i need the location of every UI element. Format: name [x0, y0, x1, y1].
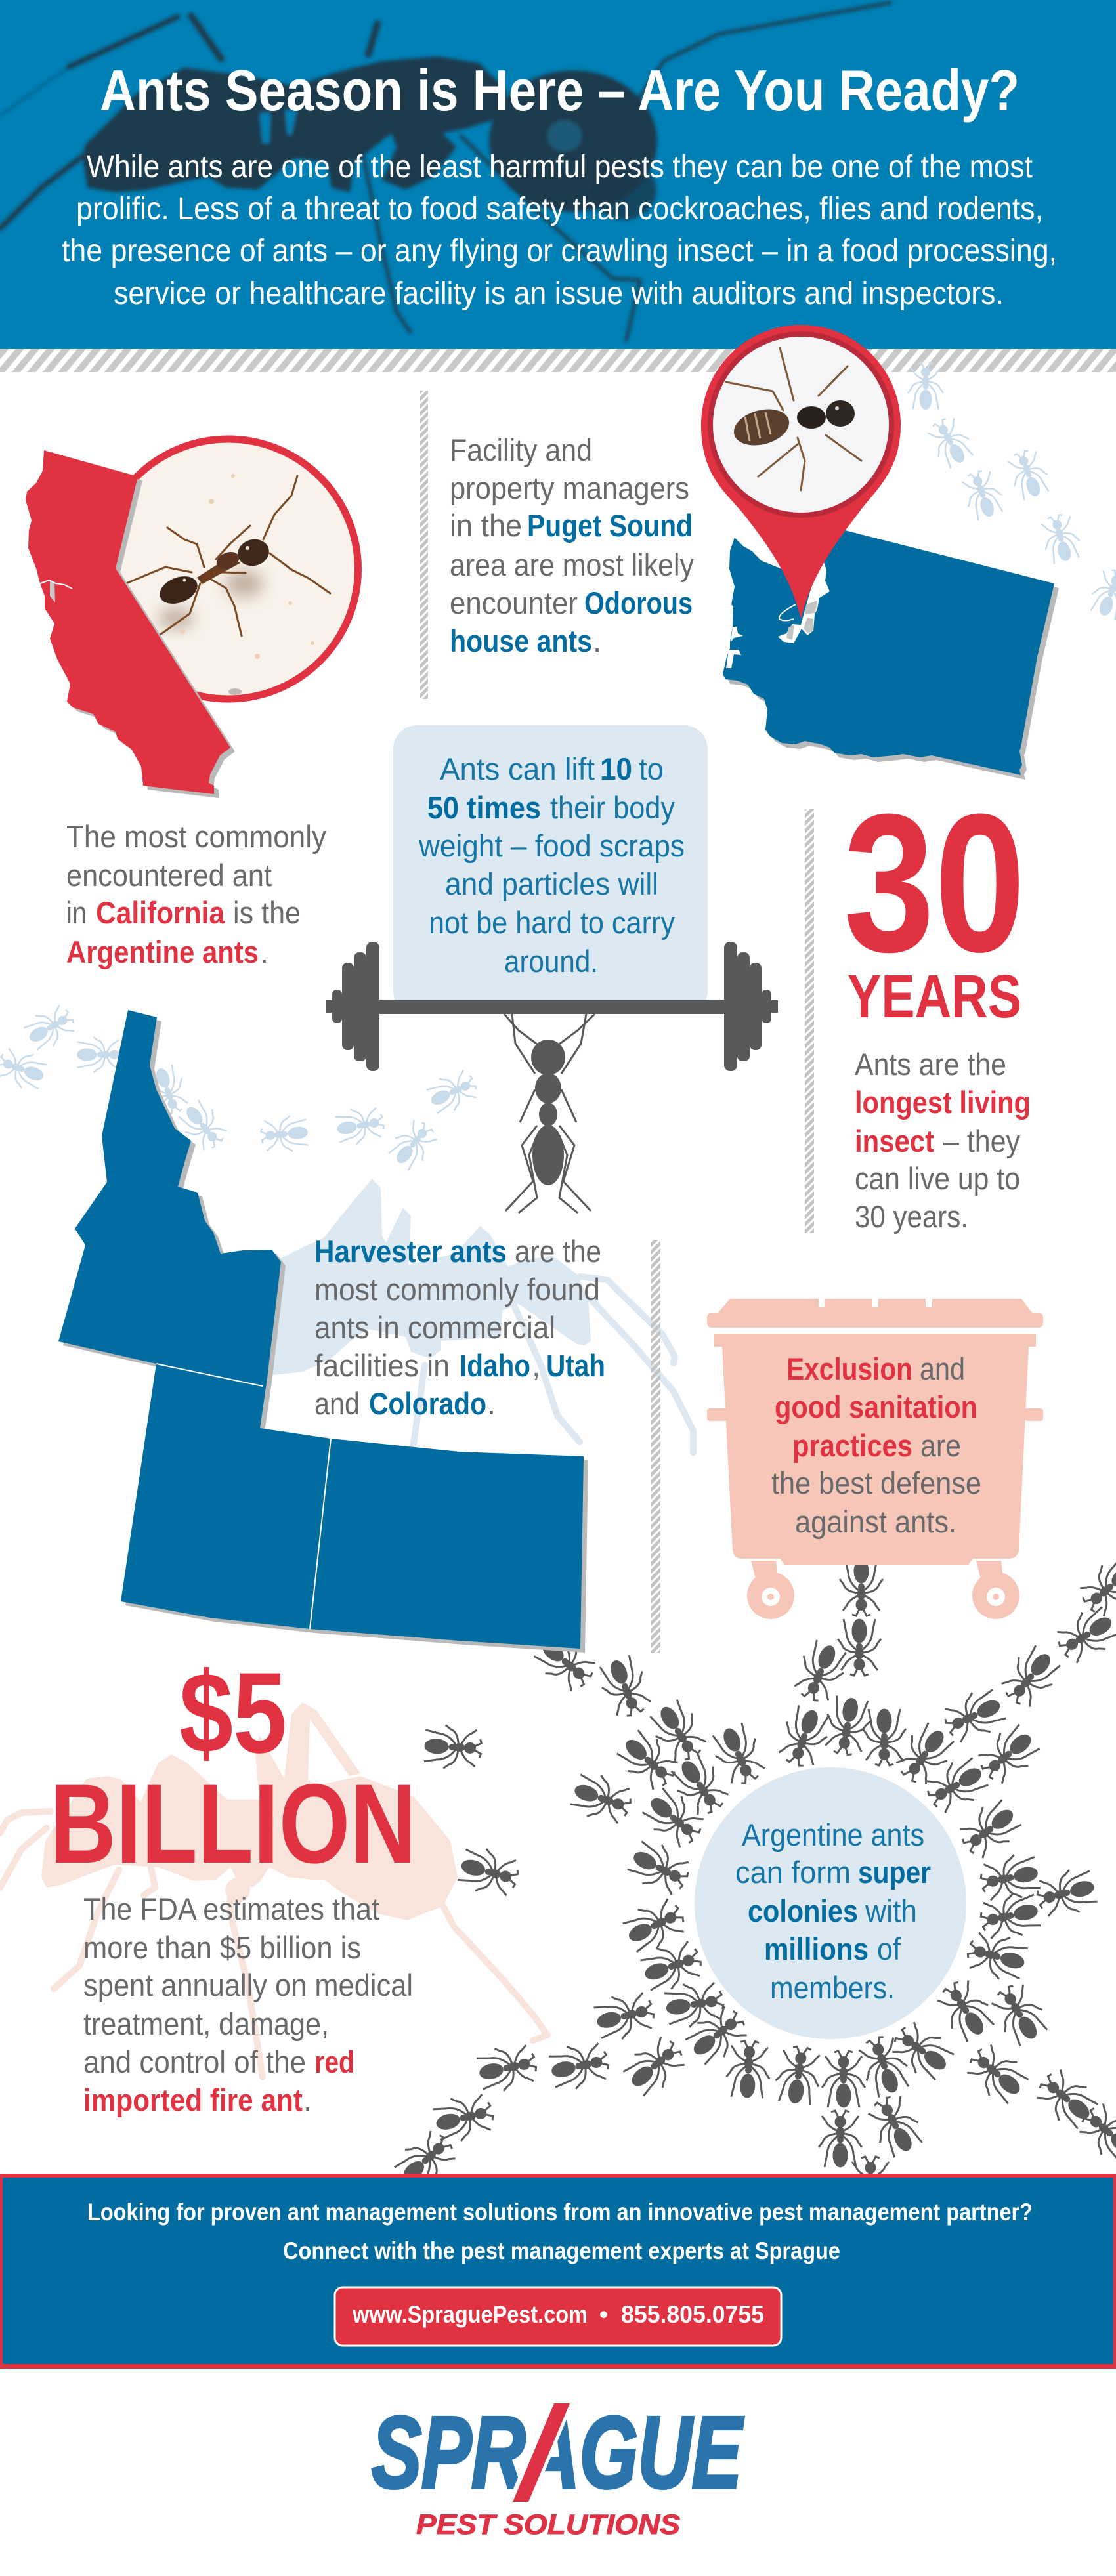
harvester text: . [487, 1386, 496, 1421]
super colony circle: can form [735, 1855, 851, 1890]
pale ants trail left [0, 1001, 481, 1173]
dumpster text: practices [792, 1428, 912, 1463]
ant lift callout card: their body [550, 790, 675, 825]
super colony circle: millions [764, 1932, 869, 1966]
california text: is the [233, 895, 301, 930]
puget sound text [450, 433, 694, 658]
sprague logo: PEST SOLUTIONS [416, 2509, 680, 2541]
intro paragraph: service or healthcare facility is an issue with auditors and inspectors. [114, 276, 1004, 311]
harvester text: Utah [546, 1348, 605, 1383]
divider [805, 809, 814, 1233]
dumpster text: Exclusion [786, 1351, 912, 1386]
intro paragraph: prolific. Less of a threat to food safety than cockroaches, flies and rodents, [76, 192, 1043, 226]
california ant photo circle [98, 439, 358, 699]
ant lift callout card: weight – food scraps [418, 828, 685, 863]
ant lift callout card: 50 times [427, 790, 541, 825]
map pin with ant photo [701, 325, 901, 619]
california text: encountered ant [66, 858, 272, 893]
puget sound text: Puget Sound [527, 508, 693, 543]
dumpster [707, 1299, 1043, 1619]
five billion stat: BILLION [50, 1761, 416, 1887]
ant lift callout card: not be hard to carry [429, 905, 675, 940]
five billion text [83, 1891, 413, 2117]
five billion stat [50, 1649, 416, 1887]
california text: in [66, 895, 87, 930]
barbell [326, 942, 778, 1071]
intro paragraph [62, 150, 1057, 311]
five billion text: . [303, 2082, 312, 2117]
dumpster text: are [920, 1428, 961, 1463]
five billion text: more than $5 billion is [83, 1930, 361, 1965]
divider [420, 391, 428, 699]
puget sound text: house ants [450, 623, 592, 658]
30 years text: can live up to [855, 1161, 1020, 1196]
divider [651, 1240, 660, 1653]
dark ant super colony [391, 1553, 1116, 2213]
ant lift callout card [393, 725, 708, 1014]
harvester text: Harvester ants [314, 1234, 507, 1269]
sprague logo [372, 2396, 744, 2541]
puget sound text: encounter [450, 585, 578, 620]
california text: Argentine ants [66, 935, 259, 969]
hatched band [0, 349, 1116, 372]
puget sound text: Facility and [450, 433, 592, 467]
california text: The most commonly [66, 819, 326, 854]
puget sound text: area are most likely [450, 547, 694, 582]
dumpster text: good sanitation [775, 1389, 977, 1424]
30 years text [855, 1047, 1031, 1234]
harvester text: and [314, 1386, 360, 1421]
intro paragraph: While ants are one of the least harmful pests they can be one of the most [87, 150, 1033, 184]
washington state shape [723, 530, 1059, 780]
harvester text [314, 1234, 605, 1421]
california text: . [260, 935, 268, 969]
harvester text: ants in commercial [314, 1310, 555, 1345]
30 years stat: 30 [844, 772, 1025, 993]
background ant photo [0, 3, 890, 341]
super colony circle: super [858, 1855, 931, 1890]
sprague logo: SPRAGUE [372, 2396, 744, 2509]
five billion text: red [314, 2044, 354, 2079]
dumpster text: against ants. [795, 1504, 956, 1539]
ant lift callout card: Ants can lift [440, 751, 595, 786]
dumpster text [771, 1351, 981, 1539]
contact button: • [599, 2301, 608, 2328]
ant lift callout card: and particles will [445, 866, 658, 901]
five billion text: and control of the [83, 2044, 306, 2079]
five billion text: spent annually on medical [83, 1968, 413, 2002]
five billion text: imported fire ant [83, 2082, 303, 2117]
pale fire ant background [0, 1702, 547, 2077]
30 years text: 30 years. [855, 1199, 968, 1234]
five billion text: treatment, damage, [83, 2006, 329, 2041]
super colony circle: of [877, 1932, 901, 1966]
ant lift callout card: around. [504, 944, 598, 979]
ant lift callout card: to [639, 751, 664, 786]
puget sound text: Odorous [584, 585, 693, 620]
harvester text: are the [515, 1234, 601, 1269]
contact button: www.SpraguePest.com [352, 2301, 588, 2328]
ant lift callout card: 10 [600, 751, 632, 786]
pale ants trail upper right [908, 363, 1116, 622]
contact button [335, 2287, 781, 2346]
california state shape [26, 450, 235, 798]
contact button: 855.805.0755 [621, 2301, 764, 2328]
harvester text: facilities in [314, 1348, 450, 1383]
puget sound text: property managers [450, 471, 689, 505]
super colony circle [695, 1767, 966, 2039]
footer call to action band [0, 2174, 1116, 2369]
dumpster text: the best defense [771, 1466, 981, 1500]
california text [66, 819, 326, 969]
30 years text: insect [855, 1124, 934, 1158]
super colony circle: Argentine ants [742, 1817, 924, 1852]
super colony circle: with [865, 1893, 917, 1928]
puget sound text: . [593, 623, 601, 658]
intro paragraph: the presence of ants – or any flying or crawling insect – in a food processing, [62, 234, 1057, 268]
super colony circle: members. [770, 1970, 895, 2005]
puget sound text: in the [450, 508, 522, 543]
pale harvester ant background [263, 1179, 693, 1452]
idaho utah colorado state shapes [58, 1010, 588, 1653]
harvester text: most commonly found [314, 1272, 600, 1307]
30 years text: Ants are the [855, 1047, 1006, 1082]
harvester text: Idaho [460, 1348, 530, 1383]
five billion stat: $5 [179, 1649, 287, 1777]
california text: California [96, 895, 225, 930]
harvester text: Colorado [369, 1386, 486, 1421]
footer call to action band: Connect with the pest management experts at Sprague [283, 2237, 840, 2264]
30 years stat: YEARS [848, 962, 1021, 1030]
30 years text: – they [943, 1124, 1020, 1158]
30 years text: longest living [855, 1085, 1031, 1120]
super colony circle: colonies [748, 1893, 858, 1928]
harvester text: , [532, 1348, 540, 1383]
header panel [0, 0, 1116, 349]
five billion text: The FDA estimates that [83, 1891, 379, 1926]
dumpster text: and [920, 1351, 965, 1386]
weightlifting ant [504, 1014, 595, 1213]
